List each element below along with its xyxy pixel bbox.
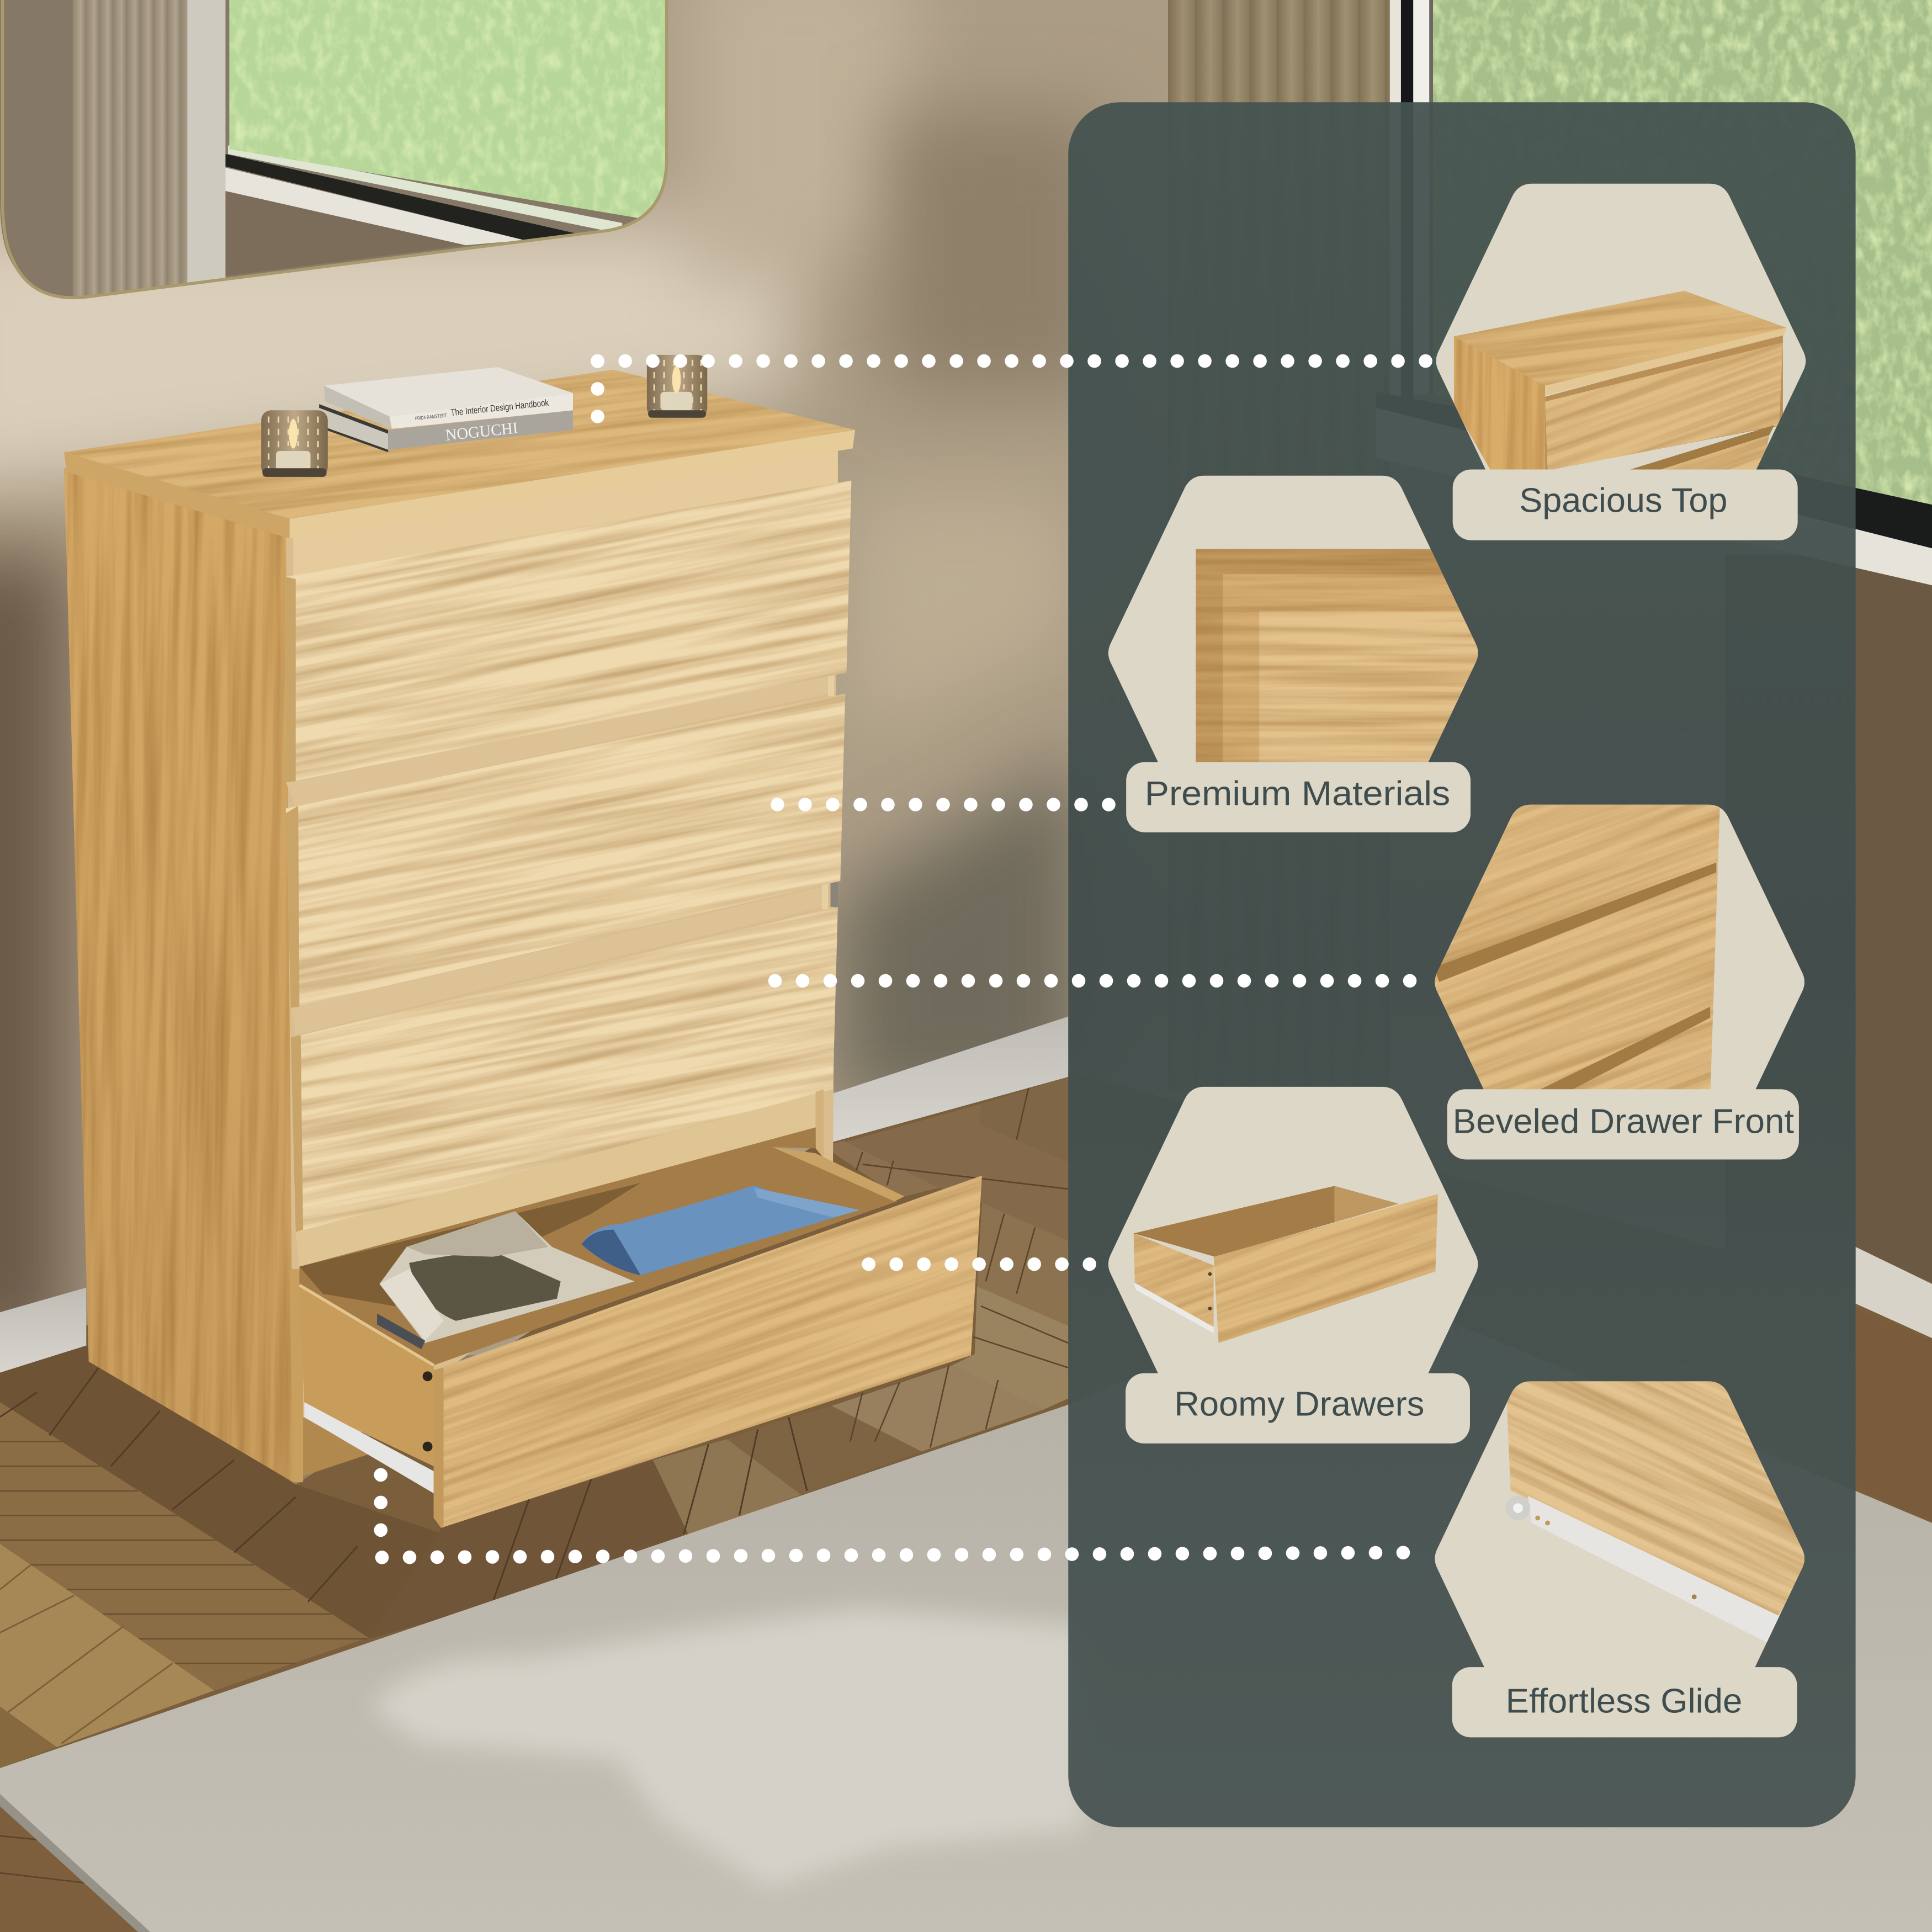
label: effortless glide [1452,1667,1797,1737]
chest of drawers [64,370,982,1528]
label: premium materials: Premium Materials [1145,774,1450,813]
label: effortless glide: Effortless Glide [1506,1682,1742,1721]
floor: herringbone parquet [0,1072,1932,1932]
baseboards [0,1017,1932,1373]
drawer slide rail [304,1402,434,1493]
feature: effortless glide [1423,1374,1817,1737]
feature: roomy drawers [1097,1078,1491,1443]
side panel [64,468,293,1482]
front floor planks [370,1406,922,1639]
label: spacious top [1453,469,1798,540]
drawer 2 [286,694,845,1008]
feature: premium materials [1097,468,1494,832]
left floor planks [0,1346,444,1768]
top surface [64,370,855,519]
label: spacious top: Spacious Top [1519,481,1727,519]
right floor planks [823,1077,1068,1451]
hexagon image: chest top [1429,179,1811,474]
open drawer side [299,1285,434,1466]
folded jeans [582,1185,860,1275]
label: roomy drawers: Roomy Drawers [1174,1385,1424,1424]
hexagon image: drawer slide [1423,1374,1817,1676]
book title noguchi: NOGUCHI [444,419,519,444]
label: roomy drawers [1126,1373,1470,1443]
open drawer recess [296,1094,816,1267]
cabinet front recess [286,444,838,1482]
book title: The Interior Design Handbook [450,397,549,418]
hexagon image: drawer fronts [1417,801,1817,1097]
dotted connector: effortless glide [381,1475,1431,1557]
cabinet left post and cavity [290,1269,303,1482]
drawer 1 [286,481,851,782]
dotted connector: spacious top [598,361,1427,416]
dotted connector: beveled drawer front [775,978,1417,984]
label: beveled drawer front [1447,1089,1799,1159]
books on top [319,367,573,452]
candle left [261,410,328,477]
open drawer interior [299,1127,904,1365]
panel: features background [1068,102,1856,1827]
open drawer front [434,1175,982,1528]
label: premium materials [1126,762,1471,832]
dotted connector: premium materials [777,802,1111,808]
drawer 3 [291,907,838,1232]
hexagon image: wood layers [1097,468,1494,765]
label: beveled drawer front: Beveled Drawer Front [1453,1102,1794,1140]
rug [0,1281,1932,1932]
folded clothes [377,1211,635,1349]
background: room wall [0,0,1932,1355]
feature: beveled drawer front [1417,801,1817,1159]
feature: spacious top [1429,179,1811,540]
book author: FRIDA RAMSTEDT [415,412,448,421]
curtain and window behind panel [1168,0,1932,585]
candle right [647,355,707,418]
wall mirror [0,0,668,308]
hexagon image: empty drawer [1097,1078,1491,1380]
dotted connector: roomy drawers [869,1261,1092,1267]
